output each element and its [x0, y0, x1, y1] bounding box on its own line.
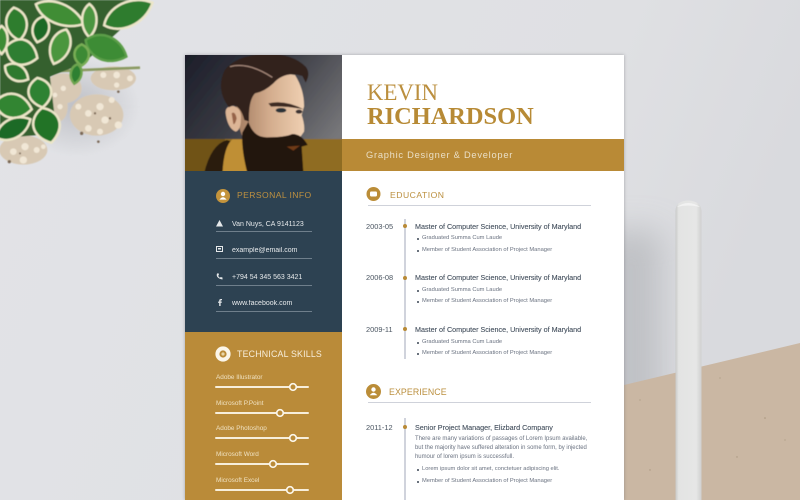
- heading: technical skills: TECHNICAL SKILLS: [237, 349, 322, 359]
- text: 2009-11: [366, 324, 393, 334]
- skill: Microsoft P.Point: [215, 400, 309, 418]
- text: Graduated Summa Cum Laude: [422, 235, 502, 241]
- text: Graduated Summa Cum Laude: [422, 339, 502, 345]
- illustration: plant decoration: [0, 0, 154, 165]
- icon: phone: [216, 273, 222, 280]
- band: job title: [342, 139, 624, 171]
- skill: Microsoft Excel: [215, 477, 309, 494]
- text: Lorem ipsum dolor sit amet, conctetuer adipiscing elit.: [422, 466, 559, 472]
- leaves: [0, 0, 158, 146]
- icon: facebook: [218, 299, 222, 306]
- heading: education: EDUCATION: [390, 190, 444, 200]
- text: Master of Computer Science, University of Maryland: [415, 273, 581, 282]
- icon: technical skills: [215, 346, 231, 362]
- text: Master of Computer Science, University of Maryland: [415, 324, 581, 334]
- skill: Microsoft Excel: Microsoft Excel: [216, 477, 259, 484]
- skill: Adobe Illustrator: [215, 374, 309, 392]
- skill: Adobe Photoshop: [215, 425, 309, 442]
- text: Member of Student Association of Project Manager: [422, 247, 552, 253]
- text: There are many variations of passages of Lorem Ipsum available,: [415, 436, 587, 442]
- text: Senior Project Manager, Elizbard Company: [415, 422, 553, 432]
- band: job title: Graphic Designer & Developer: [366, 150, 513, 160]
- skill: Microsoft Word: Microsoft Word: [216, 451, 259, 458]
- text: email: example@email.com: [232, 246, 297, 254]
- text: phone: +794 54 345 563 3421: [232, 274, 302, 280]
- skill: Adobe Illustrator: Adobe Illustrator: [216, 374, 263, 381]
- text: Graduated Summa Cum Laude: [422, 287, 502, 293]
- text: humour of lorem ipsum is successfull.: [415, 454, 514, 460]
- entry: 2003-05: [366, 222, 581, 253]
- icon: location: [216, 220, 223, 226]
- title: last name: RICHARDSON: [367, 103, 534, 130]
- entry: 2006-08: [366, 273, 581, 304]
- icon: pencil prop: [676, 200, 702, 500]
- text: Member of Student Association of Project Manager: [422, 298, 552, 304]
- skill: Adobe Photoshop: Adobe Photoshop: [216, 425, 267, 432]
- text: 2006-08: [366, 273, 393, 282]
- text: Member of Student Association of Project Manager: [422, 350, 552, 356]
- resume document: [185, 55, 624, 500]
- text: but the majority have suffered alteration in some form, by injected: [415, 445, 587, 451]
- icon: experience: [366, 384, 381, 399]
- portrait figure: [203, 54, 308, 177]
- panel: personal info: [185, 171, 342, 332]
- text: Member of Student Association of Project Manager: [422, 478, 552, 484]
- entry: 2009-11: [366, 324, 581, 356]
- panel: photo: [185, 55, 342, 171]
- panel: technical skills: [185, 332, 342, 500]
- icon: education: [366, 187, 380, 201]
- text: Master of Computer Science, University of Maryland: [415, 222, 581, 230]
- text: 2003-05: [366, 222, 393, 230]
- gold band: [185, 138, 342, 171]
- text: 2011-12: [366, 422, 393, 432]
- icon: email: [216, 246, 223, 252]
- text: website: www.facebook.com: [232, 300, 292, 306]
- icon: personal info: [216, 189, 230, 203]
- heading: experience: EXPERIENCE: [389, 386, 447, 396]
- text: address: Van Nuys, CA 9141123: [232, 220, 304, 228]
- heading: personal info: PERSONAL INFO: [237, 190, 312, 200]
- skill: Microsoft P.Point: Microsoft P.Point: [216, 400, 263, 407]
- title: first name: KEVIN: [367, 80, 438, 105]
- entry: 2011-12: [366, 422, 587, 484]
- skill: Microsoft Word: [215, 451, 309, 468]
